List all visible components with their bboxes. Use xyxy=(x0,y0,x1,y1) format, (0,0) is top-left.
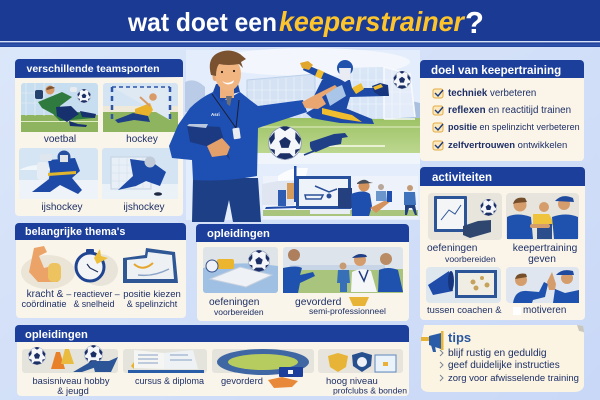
panel: belangrijke thema's: positie kiezen xyxy=(123,289,181,300)
icon: muscle arm xyxy=(21,246,75,289)
goalkeeper xyxy=(300,60,389,124)
goal checklist xyxy=(433,88,580,151)
panel: opleidingen middle: semi-professionneel xyxy=(309,306,386,316)
panel: verschillende teamsporten: ijshockey xyxy=(41,202,83,213)
panel: opleidingen middle: voorbereiden xyxy=(214,307,264,317)
panel: tips: zorg voor afwisselende training xyxy=(448,373,579,384)
coach figure xyxy=(169,50,337,222)
title banner: wat doet een xyxy=(127,7,277,37)
panel: opleidingen bottom: basisniveau hobby xyxy=(32,376,110,386)
panel: tips: geef duidelijke instructies xyxy=(448,360,560,371)
panel: opleidingen bottom xyxy=(15,325,409,396)
icon: tactics board xyxy=(123,248,178,283)
panel: doel van keepertraining xyxy=(420,60,584,161)
panel: activiteiten: activiteiten xyxy=(432,172,492,184)
panel: belangrijke thema's: belangrijke thema's xyxy=(25,226,125,238)
front ball xyxy=(393,71,411,89)
icon: megaphone xyxy=(421,331,444,352)
goal checklist: techniek verbeteren xyxy=(448,88,536,99)
panel: activiteiten: oefeningen xyxy=(427,243,477,254)
panel: verschillende teamsporten xyxy=(15,59,183,216)
panel: belangrijke thema's xyxy=(15,223,186,318)
panel: opleidingen bottom: hoog niveau xyxy=(326,376,378,387)
panel: opleidingen bottom: & jeugd xyxy=(57,386,89,396)
field xyxy=(254,118,420,153)
goal checklist: reflexen en reactitijd trainen xyxy=(448,105,571,116)
image: motiveren xyxy=(506,267,579,303)
panel: opleidingen middle: gevorderd xyxy=(295,297,342,308)
panel: activiteiten: motiveren xyxy=(523,305,566,316)
panel: verschillende teamsporten: ijshockey xyxy=(123,202,165,213)
panel: opleidingen bottom: profclubs & bonden xyxy=(333,386,407,396)
panel: opleidingen middle xyxy=(196,224,409,321)
image: oefeningen voorbereiden xyxy=(428,193,502,240)
icon: gold medal bowl xyxy=(349,297,369,306)
image: hockey xyxy=(103,83,178,132)
panel: opleidingen bottom: gevorderd xyxy=(221,376,263,386)
image: tussen coachen xyxy=(426,267,501,303)
image: voetbal keeper xyxy=(21,83,98,132)
panel: activiteiten: voorbereiden xyxy=(445,254,496,264)
title banner xyxy=(0,0,600,47)
panel: belangrijke thema's: coördinatie xyxy=(22,299,66,309)
panel: activiteiten: keepertraining xyxy=(513,243,578,254)
image: oefeningen voorbereiden xyxy=(203,247,278,293)
panel: belangrijke thema's: & snelheid xyxy=(73,299,115,309)
image: ijshockey 1 xyxy=(19,148,98,199)
back goal xyxy=(247,74,315,120)
panel: opleidingen bottom: cursus & diploma xyxy=(135,376,204,386)
panel: activiteiten: tussen coachen & xyxy=(427,304,502,315)
panel: belangrijke thema's: & spelinzicht xyxy=(127,299,178,309)
title banner: ? xyxy=(465,5,484,40)
panel: activiteiten xyxy=(420,167,585,320)
panel: verschillende teamsporten: verschillende teamsporten xyxy=(26,63,160,75)
front goal xyxy=(345,67,384,119)
panel: doel van keepertraining: doel van keepertraining xyxy=(431,64,561,77)
image: keepertraining geven xyxy=(506,193,579,240)
keeper glove on grass xyxy=(310,133,348,152)
panel: belangrijke thema's: kracht & xyxy=(27,289,64,300)
image: cursus book xyxy=(123,349,207,373)
title banner: keeperstrainer xyxy=(279,6,465,37)
panel: tips: tips xyxy=(448,330,471,345)
panel: activiteiten: geven xyxy=(528,254,556,265)
image: stadium xyxy=(212,349,314,377)
goal checklist: positie en spelinzicht verbeteren xyxy=(448,122,580,132)
icon: stopwatch xyxy=(76,249,118,286)
image: cones and balls xyxy=(22,345,118,373)
panel: opleidingen middle: opleidingen xyxy=(207,228,270,240)
central illustration: coach and goalkeeper xyxy=(169,48,420,222)
panel: verschillende teamsporten: voetbal xyxy=(44,134,76,145)
image: gevorderd staff on field xyxy=(283,247,403,293)
image: ijshockey 2 xyxy=(102,148,178,199)
lower scene: tablet and staff xyxy=(262,166,418,219)
coach figure: Asri xyxy=(211,112,220,117)
panel: verschillende teamsporten: hockey xyxy=(126,134,158,145)
panel: belangrijke thema's: – reactiever – xyxy=(66,289,120,299)
panel: tips xyxy=(421,325,584,392)
image: badges xyxy=(318,349,403,373)
icon: orange cones pile xyxy=(268,377,298,388)
panel: tips: blijf rustig en geduldig xyxy=(448,348,547,359)
large ball xyxy=(269,126,301,159)
goal checklist: zelfvertrouwen ontwikkelen xyxy=(448,140,567,151)
panel: opleidingen middle: oefeningen xyxy=(209,297,259,308)
panel: opleidingen bottom: opleidingen xyxy=(25,329,88,341)
